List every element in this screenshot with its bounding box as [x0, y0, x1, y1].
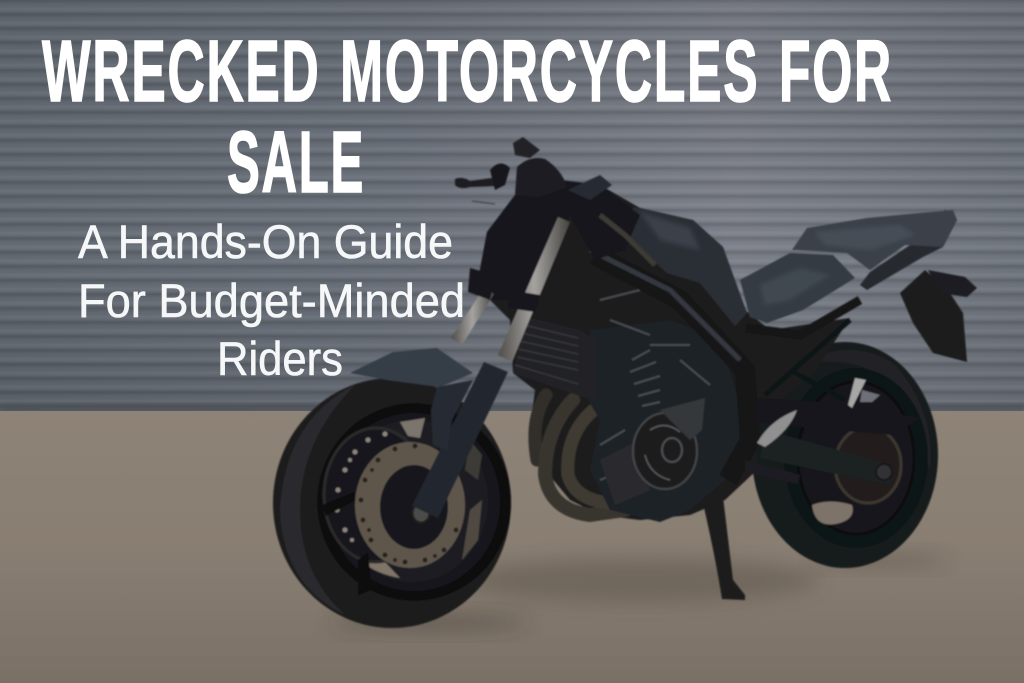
title: SALE: [227, 114, 365, 211]
title: [42, 23, 893, 211]
tail section: [860, 210, 957, 290]
subtitle: [78, 215, 465, 385]
tail grab rail: [928, 270, 977, 297]
front wheel: [273, 378, 511, 628]
exhaust pipes: [535, 395, 640, 515]
bike body silhouette: [478, 180, 850, 520]
background: concrete ground: [0, 411, 1024, 683]
rider seat: [740, 253, 855, 323]
background: roller shutter wall: [0, 0, 1024, 412]
frame and swingarm: [590, 250, 920, 485]
front forks: [412, 217, 570, 518]
kickstand: [703, 497, 745, 600]
radiator: [513, 317, 595, 397]
rear footpeg: [757, 410, 797, 447]
pillion seat: [792, 210, 957, 270]
subtitle: A Hands-On Guide: [78, 215, 453, 268]
subtitle: Riders: [217, 332, 343, 385]
engine block: [585, 290, 745, 522]
front fender: [350, 348, 473, 450]
fuel tank: [630, 207, 747, 326]
tail fender: [900, 270, 967, 362]
rear wheel: [752, 342, 938, 568]
upper fairing and controls: [455, 137, 655, 300]
subtitle: For Budget-Minded: [78, 274, 465, 327]
motorcycle: [273, 137, 977, 628]
